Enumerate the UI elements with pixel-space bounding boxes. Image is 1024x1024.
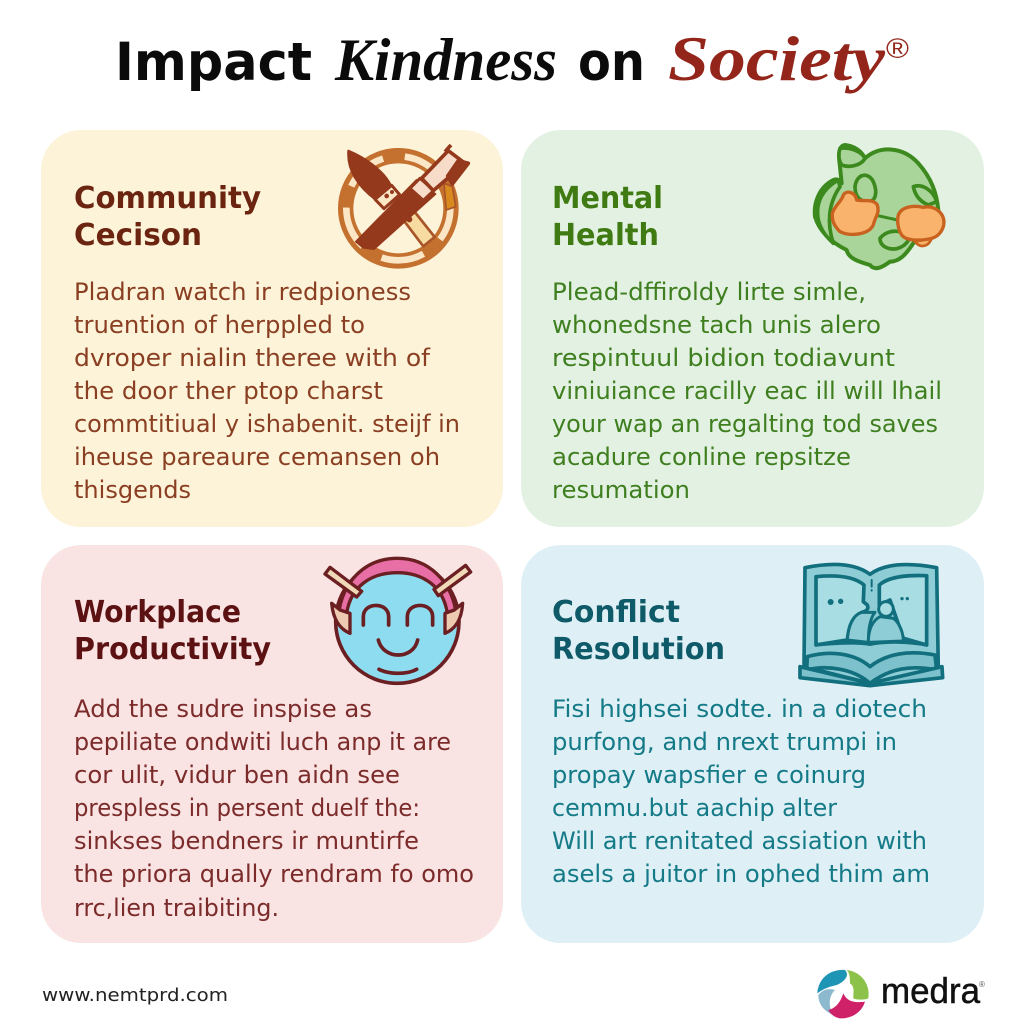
panel: workplace productivity (41, 545, 503, 943)
title: Society (668, 23, 886, 94)
title (115, 23, 909, 94)
text block: conflict resolution: propay wapsfier e coinurg (552, 761, 866, 789)
text block: workplace productivity: Add the sudre inspise as (74, 695, 372, 723)
footer url: www.nemtprd.com (42, 985, 228, 1006)
heading: workplace productivity: Productivity (74, 632, 271, 667)
icon: open book with two figures (800, 564, 943, 686)
heading: community: Community (74, 181, 261, 216)
text block: community: the door ther ptop charst (74, 377, 383, 405)
text block: workplace productivity: prespless in persent duelf the: (74, 794, 420, 822)
panel: mental health (521, 130, 984, 527)
heading: mental health: Mental (552, 181, 663, 216)
text block: community: thisgends (74, 476, 191, 504)
text block: conflict resolution: asels a juitor in ophed thim am (552, 860, 930, 888)
heading: conflict resolution: Resolution (552, 632, 725, 667)
icon: green figure with orange fists (815, 145, 944, 268)
text block: conflict resolution: purfong, and nrext trumpi in (552, 728, 897, 756)
text block: mental health: resumation (552, 476, 690, 504)
text block: workplace productivity: sinkses bendners ir muntirfe (74, 827, 419, 855)
icon: smiling blue face with headband (325, 558, 471, 683)
text block: community: truention of herppled to (74, 311, 365, 339)
title: ® (886, 33, 909, 64)
text block: workplace productivity: pepiliate ondwiti luch anp it are (74, 728, 451, 756)
text block: mental health: respintuul bidion todiavunt (552, 344, 895, 372)
title: on (578, 32, 645, 93)
panel: conflict resolution (521, 545, 984, 943)
text block: mental health: viniuiance racilly eac ill will lhail (552, 377, 942, 405)
text block: mental health: your wap an regalting tod saves (552, 410, 938, 438)
icon: crossed knife and tool in ring (346, 145, 468, 261)
text block: workplace productivity: the priora qually rendram fo omo (74, 860, 474, 888)
text block: conflict resolution: cemmu.but aachip alter (552, 794, 837, 822)
heading: community: Cecison (74, 218, 202, 253)
text block: workplace productivity: rrc,lien traibiting. (74, 894, 279, 922)
panel: community decision (41, 130, 503, 527)
heading: conflict resolution: Conflict (552, 595, 680, 630)
logo: medra (817, 970, 985, 1018)
heading: mental health: Health (552, 218, 659, 253)
text block: mental health: Plead-dffiroldy lirte simle, (552, 278, 866, 306)
title: Impact (115, 32, 312, 93)
text block: conflict resolution: Fisi highsei sodte. in a diotech (552, 695, 927, 723)
text block: mental health: acadure conline repsitze (552, 443, 851, 471)
logo wordmark: medra (881, 970, 981, 1011)
text block: community: Pladran watch ir redpioness (74, 278, 411, 306)
heading: workplace productivity: Workplace (74, 595, 241, 630)
text block: community: dvroper nialin theree with of (74, 344, 431, 372)
title: Kindness (334, 27, 557, 93)
text block: mental health: whonedsne tach unis alero (552, 311, 881, 339)
text block: community: commtitiual y ishabenit. steijf in (74, 410, 460, 438)
logo: medra: ® (979, 980, 985, 989)
logo mark (817, 970, 869, 1018)
text block: community: iheuse pareaure cemansen oh (74, 443, 440, 471)
text block: conflict resolution: Will art renitated assiation with (552, 827, 927, 855)
text block: workplace productivity: cor ulit, vidur ben aidn see (74, 761, 400, 789)
